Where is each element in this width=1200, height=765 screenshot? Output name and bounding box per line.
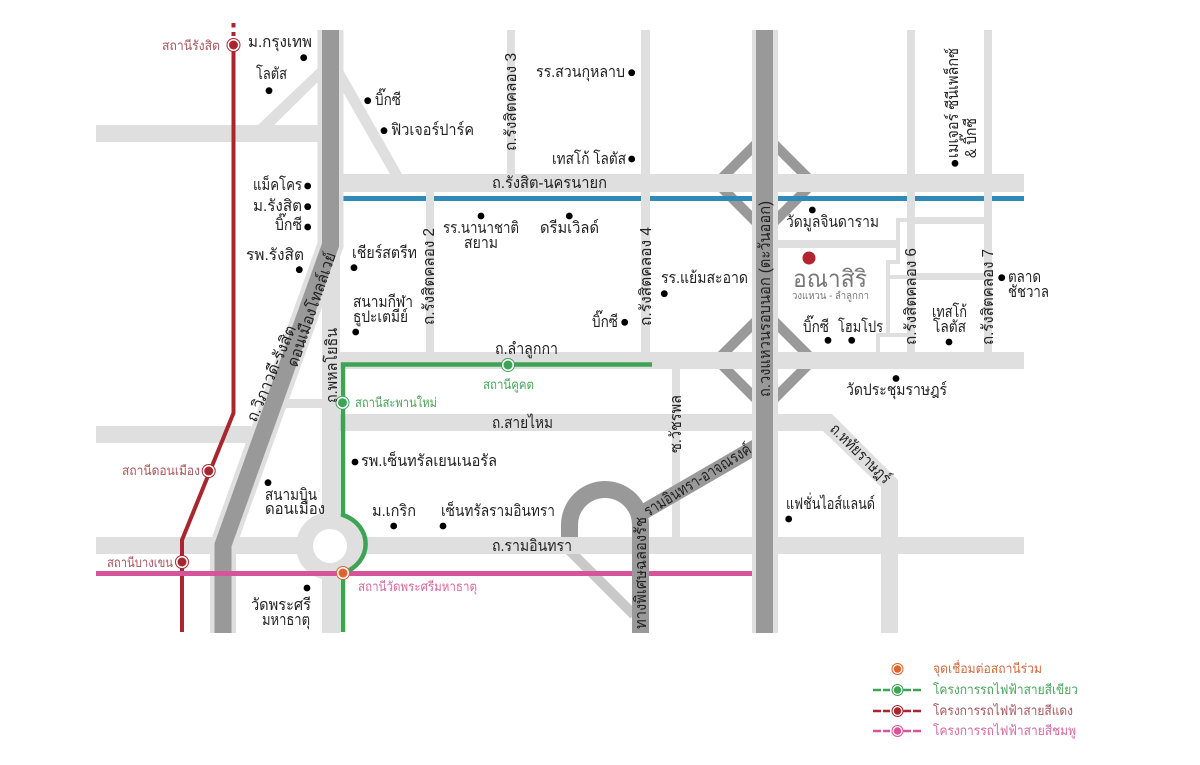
landmark: Fashion Island: แฟชั่นไอส์แลนด์ [786,492,875,513]
landmark: Krirk University: ม.เกริก [372,503,416,520]
landmark: Wat Mun Chindaram: วัดมูลจินดาราม [786,214,879,232]
landmark: Tesco Lotus Khlong 6: โลตัส [933,317,966,336]
project marker: Anasiri Wongwaen - Lam Luk Ka: วงแหวน - ลำลูกกา [792,291,869,302]
station: Wat Phra Sri Mahathat interchange: สถานีวัดพระศรีมหาธาตุ [358,579,477,595]
road label: Rangsit Khlong 7: ถ.รังสิตคลอง 7 [980,249,997,345]
legend item: interchange: จุดเชื่อมต่อสถานีร่วม [933,660,1042,677]
legend item: pink line [873,723,1076,739]
station: Khu Khot [483,358,534,393]
Don Mueang tollway [223,30,330,633]
landmark: Major Cineplex and Big C: เมเจอร์ ซีนีเพล็กซ์ [942,48,962,158]
station: Bang Khen: สถานีบางเขน [107,555,173,570]
road label: Rangsit Khlong 4: ถ.รังสิตคลอง 4 [638,227,655,326]
landmark: Future Park: ฟิวเจอร์ปาร์ค [391,120,474,139]
Chalong Rat expressway U-turn [570,490,640,633]
station: Wat Phra Sri Mahathat interchange [336,566,477,595]
legend [873,660,1078,739]
landmark: Siam international school: สยาม [464,235,498,252]
road label: Lam Luk Ka: ถ.ลำลูกกา [495,341,558,359]
landmark: Rangsit Hospital [246,247,304,273]
landmark: Yaem Sa-at school: รร.แย้มสะอาด [661,269,748,287]
legend item: green line [873,682,1078,697]
landmark: HomePro: โฮมโปร [838,317,883,336]
landmark: Big C Lam Luk Ka [592,310,628,331]
green line [343,364,652,632]
landmark: Wat Prachum Rat [846,375,947,400]
landmark: Tesco Lotus Khlong 4: เทสโก้ โลตัส [552,149,626,168]
station: Rangsit: สถานีรังสิต [162,38,220,53]
road label: Ram Inthra: ถ.รามอินทรา [492,538,572,555]
road label: Sai Mai: ถ.สายไหม [492,413,553,432]
landmark: Central Ram Inthra [440,500,555,529]
landmark: Central General Hospital: รพ.เซ็นทรัลเยนเนอรัล [361,450,497,470]
landmark: Thupatemi Stadium [352,293,413,335]
blue rail line [343,196,1024,201]
road label: Phahonyothin: ถ.พหลโยธิน [322,328,341,403]
landmark: Big C Rangsit: บิ๊กซี [375,88,401,109]
landmark: Big C west [275,213,311,234]
landmark: Dream World [540,213,599,237]
pink line [96,571,752,576]
road label: Ram Inthra-At Narong: รามอินทรา-อาจณรงค์ [640,439,755,520]
landmark: Wat Phra Sri Mahathat: มหาธาตุ [262,612,310,630]
landmark: Thupatemi Stadium: สนามกีฬา [353,293,413,311]
landmark: Major Cineplex and Big C [942,48,980,167]
landmark: HomePro [838,317,883,344]
road label: Don Mueang tollway: ดอนเมืองโทลล์เวย์ [283,250,340,369]
interchange ramps: ring road diamonds [717,135,813,408]
station: Saphan Mai: สถานีสะพานใหม่ [355,395,437,410]
landmark: Wat Mun Chindaram [786,207,879,232]
landmark: Don Mueang Airport: สนามบิน [265,487,317,504]
landmark: Rangsit Hospital: รพ.รังสิต [246,247,304,264]
Ram Inthra-At Narong expressway [640,440,752,520]
landmark: Wat Phra Sri Mahathat [251,585,311,630]
landmark: Makro: แม็คโคร [253,174,302,194]
landmark: Central Ram Inthra: เซ็นทรัลรามอินทรา [441,500,555,520]
road label: Chalong Rat expressway: ทางพิเศษฉลองรัช [633,517,650,629]
landmark: Bangkok University: ม.กรุงเทพ [248,34,312,52]
landmark: Thupatemi Stadium: ธูปะเตมีย์ [353,307,408,327]
station: Khu Khot: สถานีคูคต [483,377,534,393]
landmark: Big C Rangsit [364,88,401,109]
landmark: Bangkok University [248,34,312,61]
landmark: Chatchawan market [998,269,1049,301]
minor soi connectors [878,220,907,352]
legend item: red line: โครงการรถไฟฟ้าสายสีแดง [933,703,1073,718]
light road network [96,30,1024,633]
landmark: Chatchawan market: ชัชวาล [1008,284,1049,301]
landmark: Wat Prachum Rat: วัดประชุมราษฎร์ [846,380,947,400]
landmark: Major Cineplex and Big C: & บิ๊กซี [959,118,980,158]
legend item: green line: โครงการรถไฟฟ้าสายสีเขียว [933,682,1078,697]
landmark: Cheer Street: เชียร์สตรีท [352,243,417,262]
landmark: Tesco Lotus Khlong 6: เทสโก้ [932,302,967,321]
roundabout centre [313,529,347,563]
red line [182,23,234,632]
landmark: Big C west: บิ๊กซี [275,213,302,234]
landmark: Lotus north: โลตัส [256,64,287,83]
landmark: Rangsit University: ม.รังสิต [253,198,302,215]
landmark: Wat Phra Sri Mahathat: วัดพระศรี [251,596,311,614]
landmark: Big C near project: บิ๊กซี [803,315,829,336]
road label: Rangsit Khlong 3: ถ.รังสิตคลอง 3 [503,53,520,151]
landmark: Krirk University [372,503,416,529]
Kanchanaphisek ring road [752,30,778,633]
landmark: Siam international school [443,213,519,252]
road label: Vibhavadi-Rangsit: ถ.วิภาวดี-รังสิต [243,323,300,425]
landmark: Lotus north [256,64,287,94]
landmark: Don Mueang Airport [265,479,325,518]
legend item: red line [873,703,1073,718]
landmark: Dream World: ดรีมเวิลด์ [540,218,599,237]
station: Don Mueang: สถานีดอนเมือง [122,463,200,478]
road label: Rangsit Khlong 6: ถ.รังสิตคลอง 6 [903,248,920,345]
landmark: Chatchawan market: ตลาด [1008,269,1041,286]
landmark: Yaem Sa-at school [661,269,748,297]
landmark: Fashion Island [785,492,875,522]
landmark: Suan Kularb school: รร.สวนกุหลาบ [536,64,625,82]
landmark: Cheer Street [351,243,417,271]
landmark: Don Mueang Airport: ดอนเมือง [265,500,325,518]
legend item: pink line: โครงการรถไฟฟ้าสายสีชมพู [933,723,1076,739]
project marker: Anasiri Wongwaen - Lam Luk Ka: อณาสิริ [793,266,867,293]
road label: Hathairat: ถ.หทัยราษฎร์ [826,419,895,488]
lower ramp under Ram Inthra [565,546,634,615]
landmark: Tesco Lotus Khlong 6 [932,302,967,345]
landmark: Big C Lam Luk Ka: บิ๊กซี [592,310,618,331]
road label: Rangsit Khlong 2: ถ.รังสิตคลอง 2 [421,228,438,325]
landmark: Big C near project [803,315,831,344]
landmark: Siam international school: รร.นานาชาติ [443,220,519,237]
road label: outer ring road: ถ.วงแหวนรอบนอก (ตะวันออก) [757,201,774,397]
road label: Soi Watcharaphon: ซ.วัชรพล [668,395,685,453]
project marker: Anasiri Wongwaen - Lam Luk Ka [792,252,869,302]
legend item: interchange [892,660,1042,677]
road label: Rangsit-Nakhon Nayok: ถ.รังสิต-นครนายก [492,175,607,192]
